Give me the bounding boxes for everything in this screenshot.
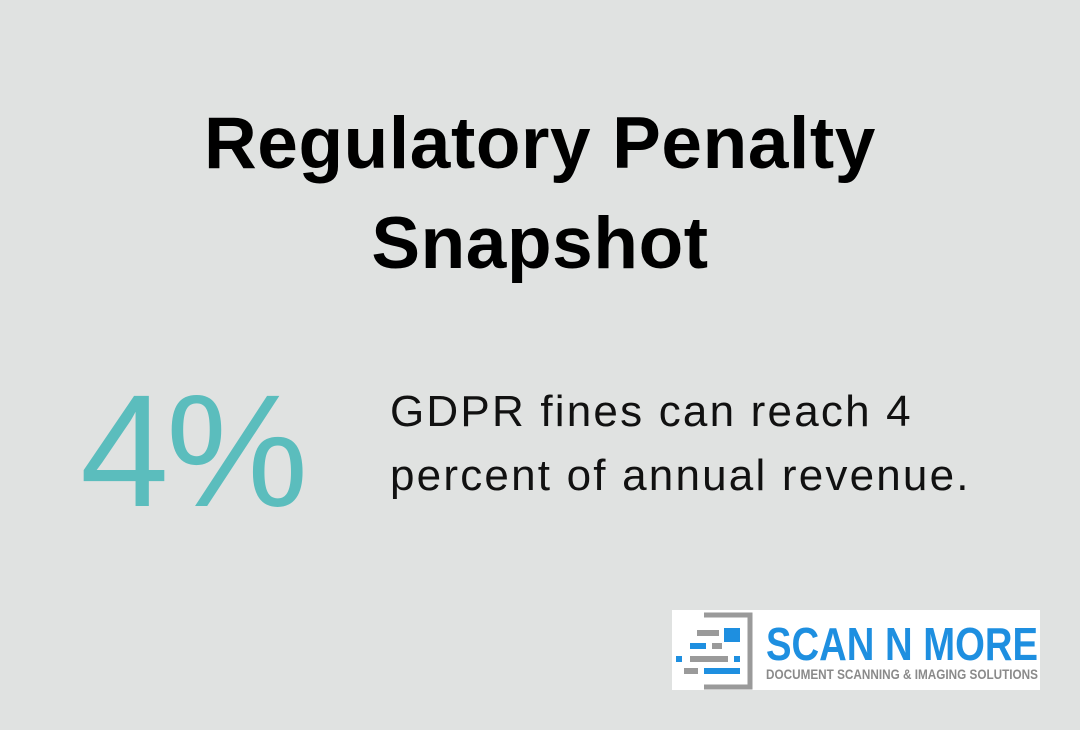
stat: 4%: 4% <box>80 361 305 540</box>
stat description: GDPR fines can reach 4 <box>390 387 913 436</box>
stat description <box>390 387 971 500</box>
icon: scanner <box>676 615 750 687</box>
title <box>204 103 876 284</box>
title: Regulatory Penalty <box>204 103 876 184</box>
title: Snapshot <box>371 203 709 284</box>
logo: Scan N More <box>672 610 1040 690</box>
stat description: percent of annual revenue. <box>390 451 971 500</box>
